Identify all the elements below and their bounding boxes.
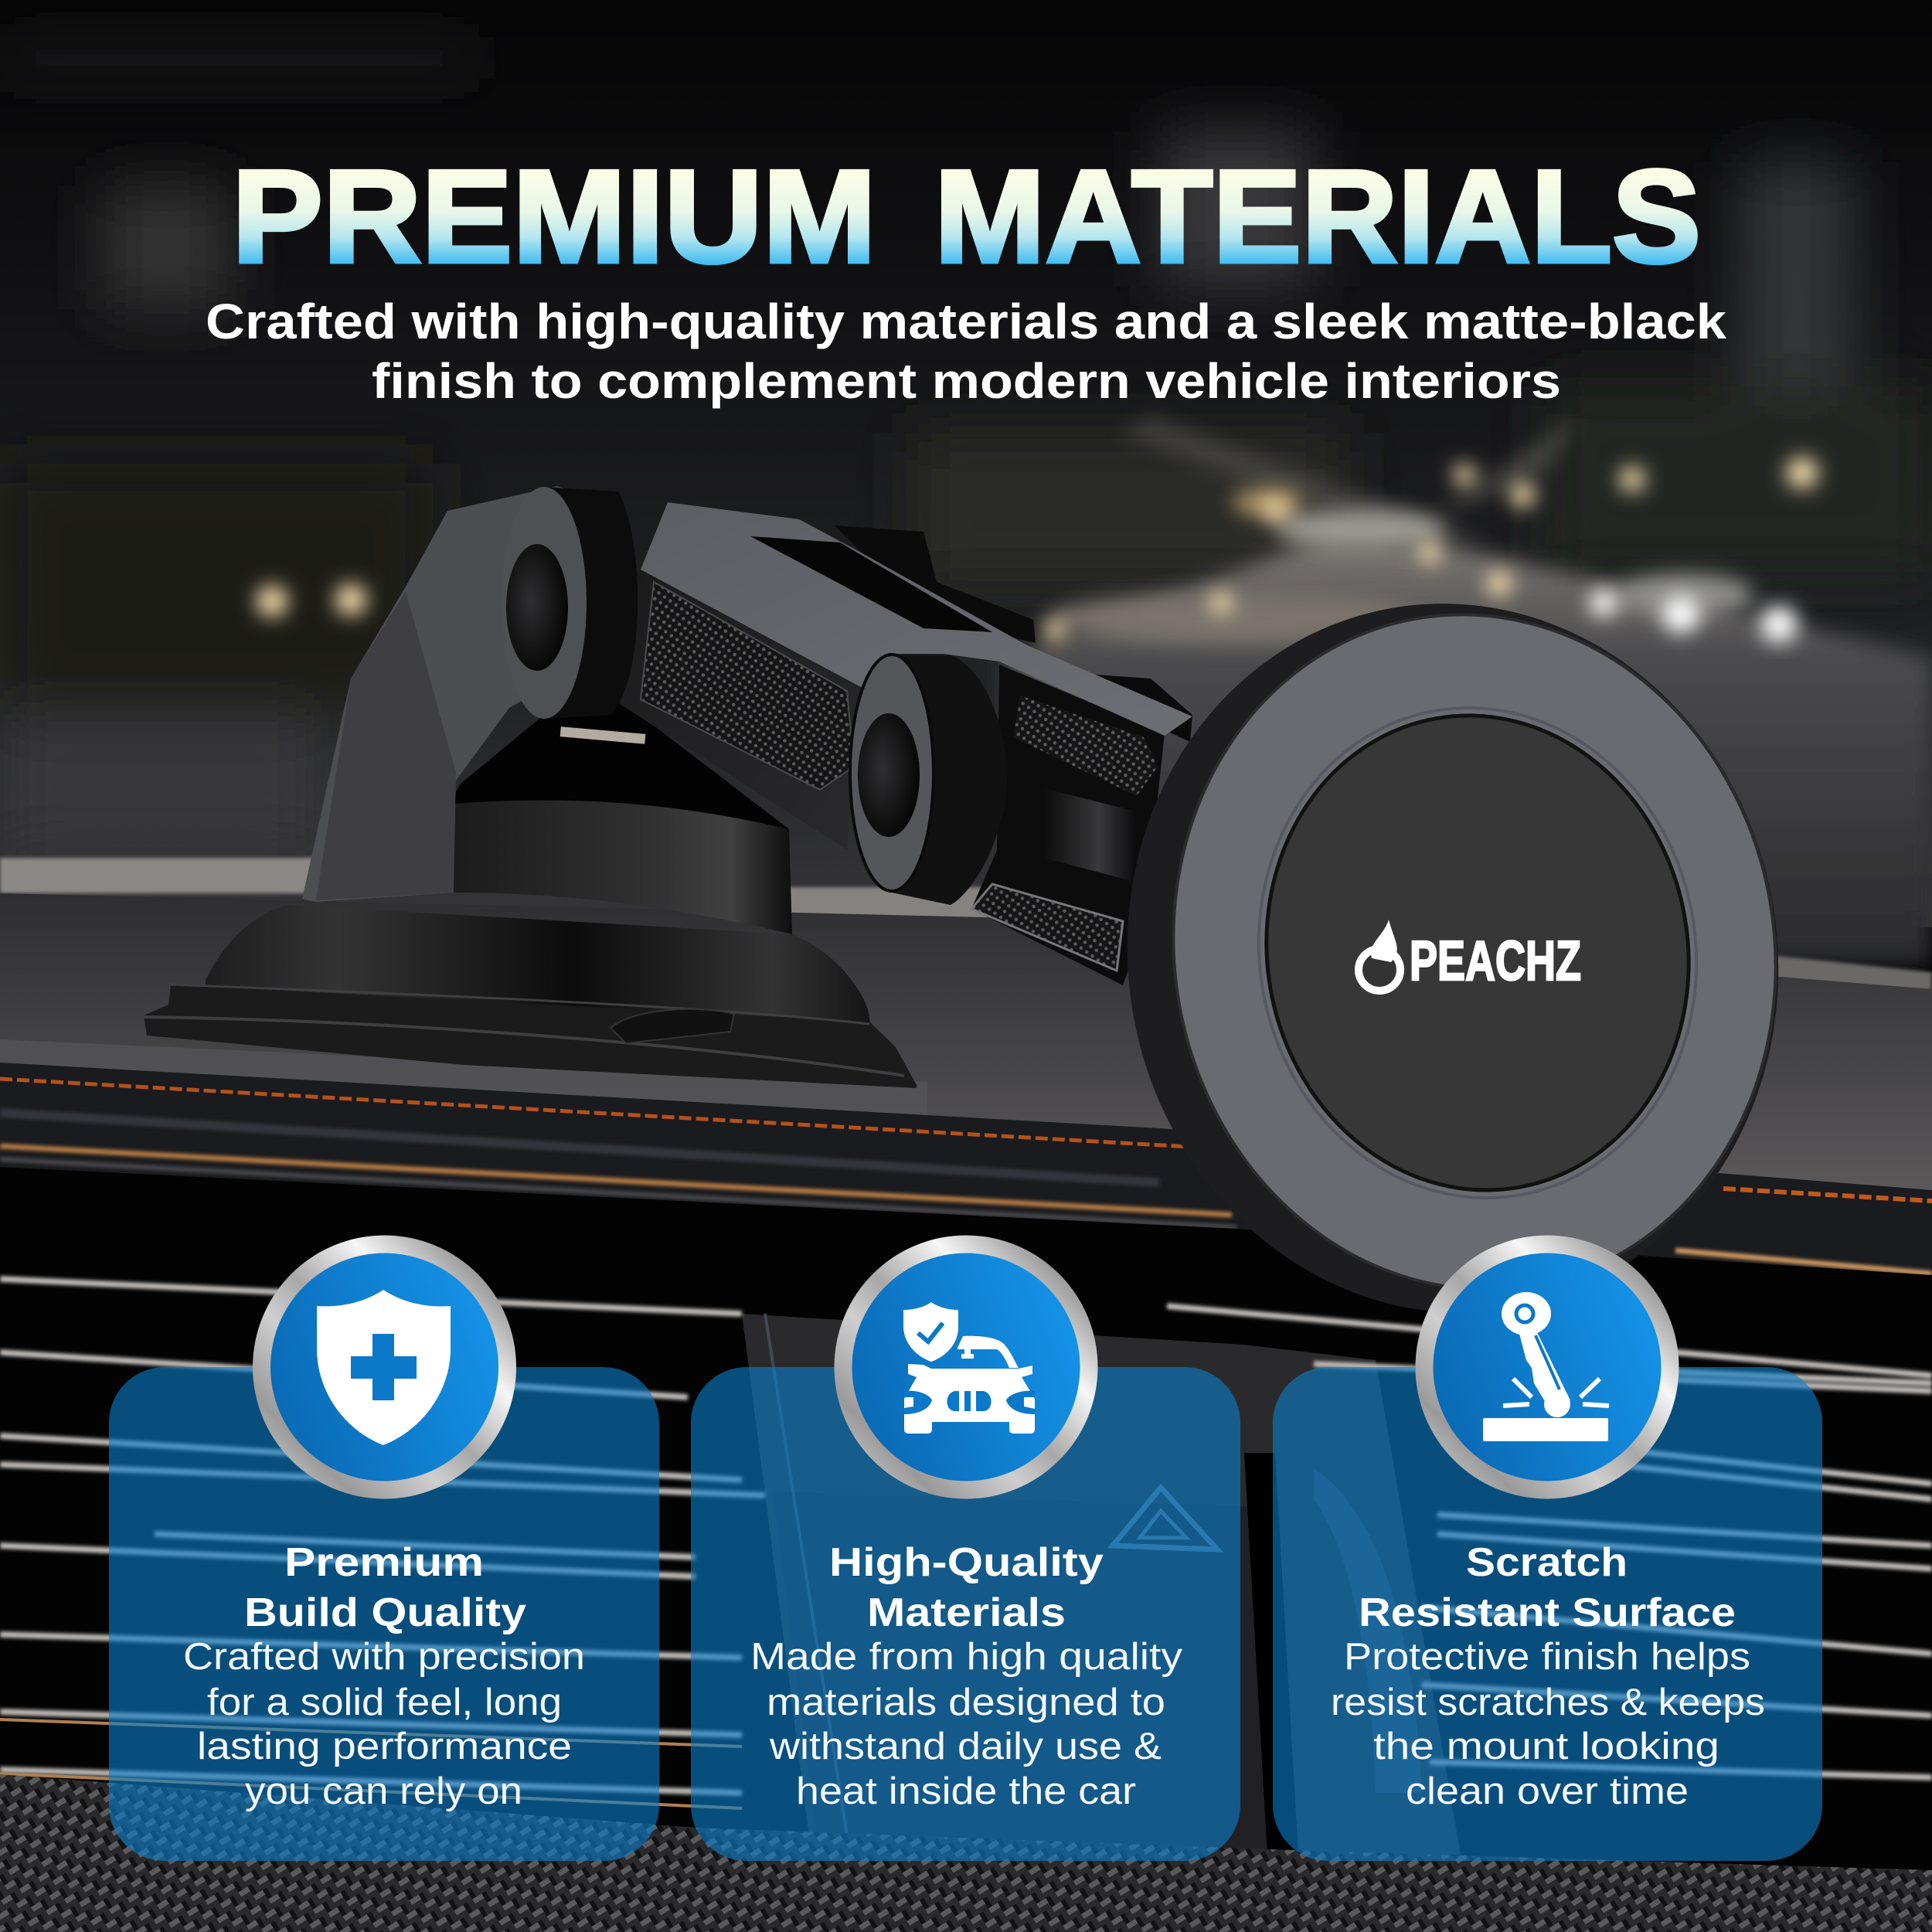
body text: clean over time <box>1406 1770 1689 1812</box>
centre console panel <box>742 1314 1461 1855</box>
body text: for a solid feel, long <box>207 1682 562 1723</box>
body text: withstand daily use & <box>769 1726 1162 1767</box>
body text: Made from high quality <box>750 1636 1183 1678</box>
heading: Build Quality <box>244 1590 526 1635</box>
background: night city street <box>0 0 1932 966</box>
icon: car with shield <box>835 1235 1097 1499</box>
icon: shield with cross <box>253 1235 516 1499</box>
brand logo: PEACHZ <box>1410 930 1581 992</box>
base column <box>454 704 792 934</box>
subtitle: Crafted with high-quality materials and a sleek matte-black <box>206 294 1726 349</box>
base black recess <box>454 699 789 829</box>
magnetic disc <box>1072 552 1834 1365</box>
heading <box>829 1540 1104 1635</box>
body text: you can rely on <box>245 1770 522 1812</box>
heading: Resistant Surface <box>1359 1590 1736 1635</box>
panel: high-quality materials <box>691 1235 1240 1861</box>
title <box>232 143 1701 291</box>
body text: resist scratches & keeps <box>1331 1682 1765 1723</box>
panel: premium build quality <box>109 1235 659 1861</box>
dashboard top surface <box>0 858 1932 1206</box>
arm mesh grip <box>641 582 854 790</box>
suction cup base <box>144 905 917 1088</box>
body text <box>1331 1636 1765 1812</box>
body text <box>750 1636 1183 1812</box>
body text: the mount looking <box>1373 1726 1719 1767</box>
panel: scratch resistant surface <box>1273 1235 1822 1861</box>
heading: Premium <box>284 1540 484 1585</box>
heading: Scratch <box>1466 1540 1628 1585</box>
lower mesh grip <box>971 884 1123 971</box>
subtitle <box>206 294 1726 409</box>
joint one <box>502 487 638 719</box>
body text <box>183 1636 585 1812</box>
heading <box>1359 1540 1736 1635</box>
brand logo <box>1359 920 1581 992</box>
lower dashboard vents <box>0 1167 1932 1932</box>
title: PREMIUM <box>232 143 876 291</box>
arm upper gray bar <box>641 502 1192 736</box>
carbon fibre trim <box>0 1774 1932 1932</box>
body text: Crafted with precision <box>183 1636 585 1678</box>
body text: lasting performance <box>197 1726 572 1767</box>
body text: materials designed to <box>767 1682 1165 1723</box>
product: magnetic car mount <box>144 486 1834 1365</box>
title: MATERIALS <box>934 143 1701 291</box>
arm black slot <box>750 536 992 632</box>
icon: key scratching surface <box>1416 1235 1679 1499</box>
dashboard trim and orange stitching <box>0 1063 1932 1314</box>
body text: heat inside the car <box>796 1770 1136 1812</box>
rear arm clips <box>835 526 1192 742</box>
far arm dark body <box>971 665 1165 985</box>
body text: Protective finish helps <box>1344 1636 1750 1678</box>
bracket highlight <box>560 726 645 744</box>
connector cylinder <box>1043 788 1136 881</box>
heading <box>244 1540 526 1635</box>
arm lower body <box>611 570 861 850</box>
subtitle: finish to complement modern vehicle interiors <box>372 353 1561 409</box>
heading: High-Quality <box>829 1540 1104 1585</box>
outer mesh grip <box>1013 696 1158 796</box>
heading: Materials <box>867 1590 1066 1635</box>
base shoulder bevel <box>316 591 456 900</box>
base gray shoulder <box>302 486 585 902</box>
joint two <box>850 655 1007 905</box>
